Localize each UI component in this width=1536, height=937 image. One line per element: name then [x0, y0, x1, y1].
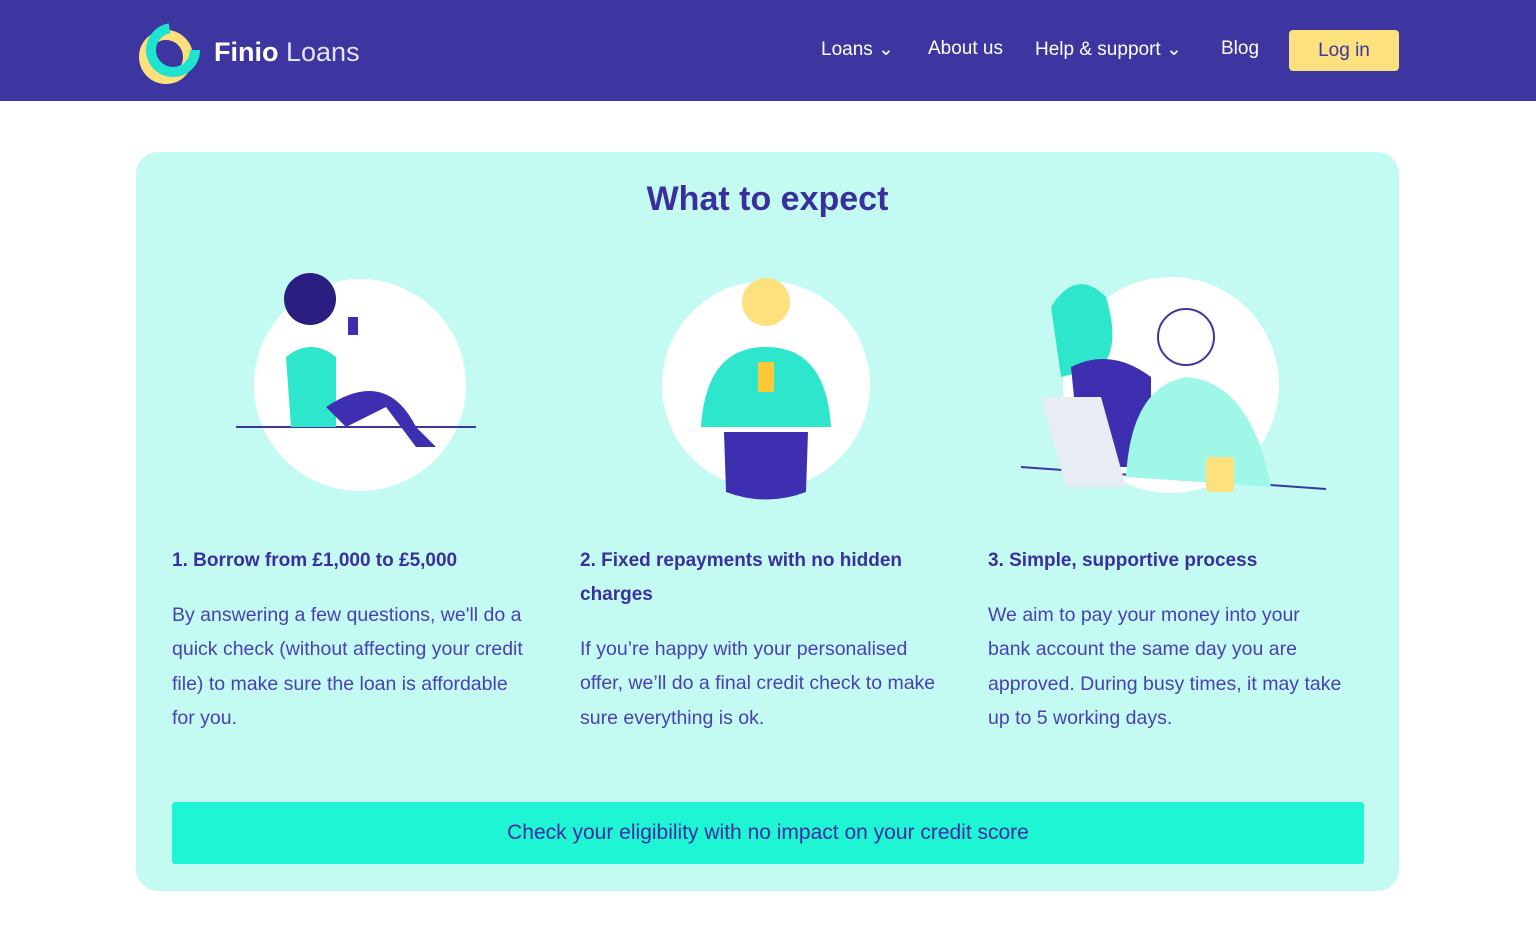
illustration 3	[1021, 277, 1326, 493]
nav bar: About us	[928, 38, 1003, 59]
panel: what to expect: for you.	[172, 707, 237, 729]
column 1: 1. Borrow from £1,000 to £5,000	[172, 550, 457, 571]
CTA button	[172, 802, 1364, 864]
panel: what to expect: We aim to pay your money into your	[988, 604, 1300, 626]
nav links: Loans ⌄	[821, 39, 894, 60]
logo	[139, 23, 360, 84]
CTA button: Check your eligibility with no impact on your credit score	[507, 821, 1029, 844]
panel: what to expect: offer, we’ll do a final credit check to make	[580, 672, 935, 694]
panel: what to expect: If you’re happy with your personalised	[580, 638, 907, 660]
nav bar	[0, 0, 1536, 101]
panel: what to expect: file) to make sure the loan is affordable	[172, 673, 508, 695]
illustration 1	[236, 273, 476, 491]
panel: what to expect: bank account the same day you are	[988, 638, 1297, 660]
logo: Finio Loans	[214, 37, 360, 67]
login button	[1289, 30, 1399, 71]
column 2: 2. Fixed repayments with no hidden charges	[580, 550, 902, 605]
column 3: 3. Simple, supportive process	[988, 550, 1257, 571]
panel: what to expect	[136, 152, 1399, 891]
illustration 2	[662, 278, 870, 500]
login button: Log in	[1318, 40, 1370, 61]
nav bar: Blog	[1221, 38, 1259, 59]
nav bar: Help & support ⌄	[1035, 39, 1182, 60]
panel: what to expect: approved. During busy times, it may take	[988, 673, 1341, 695]
panel: what to expect: By answering a few questions, we'll do a	[172, 604, 522, 626]
panel: what to expect: up to 5 working days.	[988, 707, 1172, 729]
panel: what to expect: sure everything is ok.	[580, 707, 764, 729]
panel: what to expect: quick check (without affecting your credit	[172, 638, 523, 660]
title: What to expect	[647, 180, 888, 218]
